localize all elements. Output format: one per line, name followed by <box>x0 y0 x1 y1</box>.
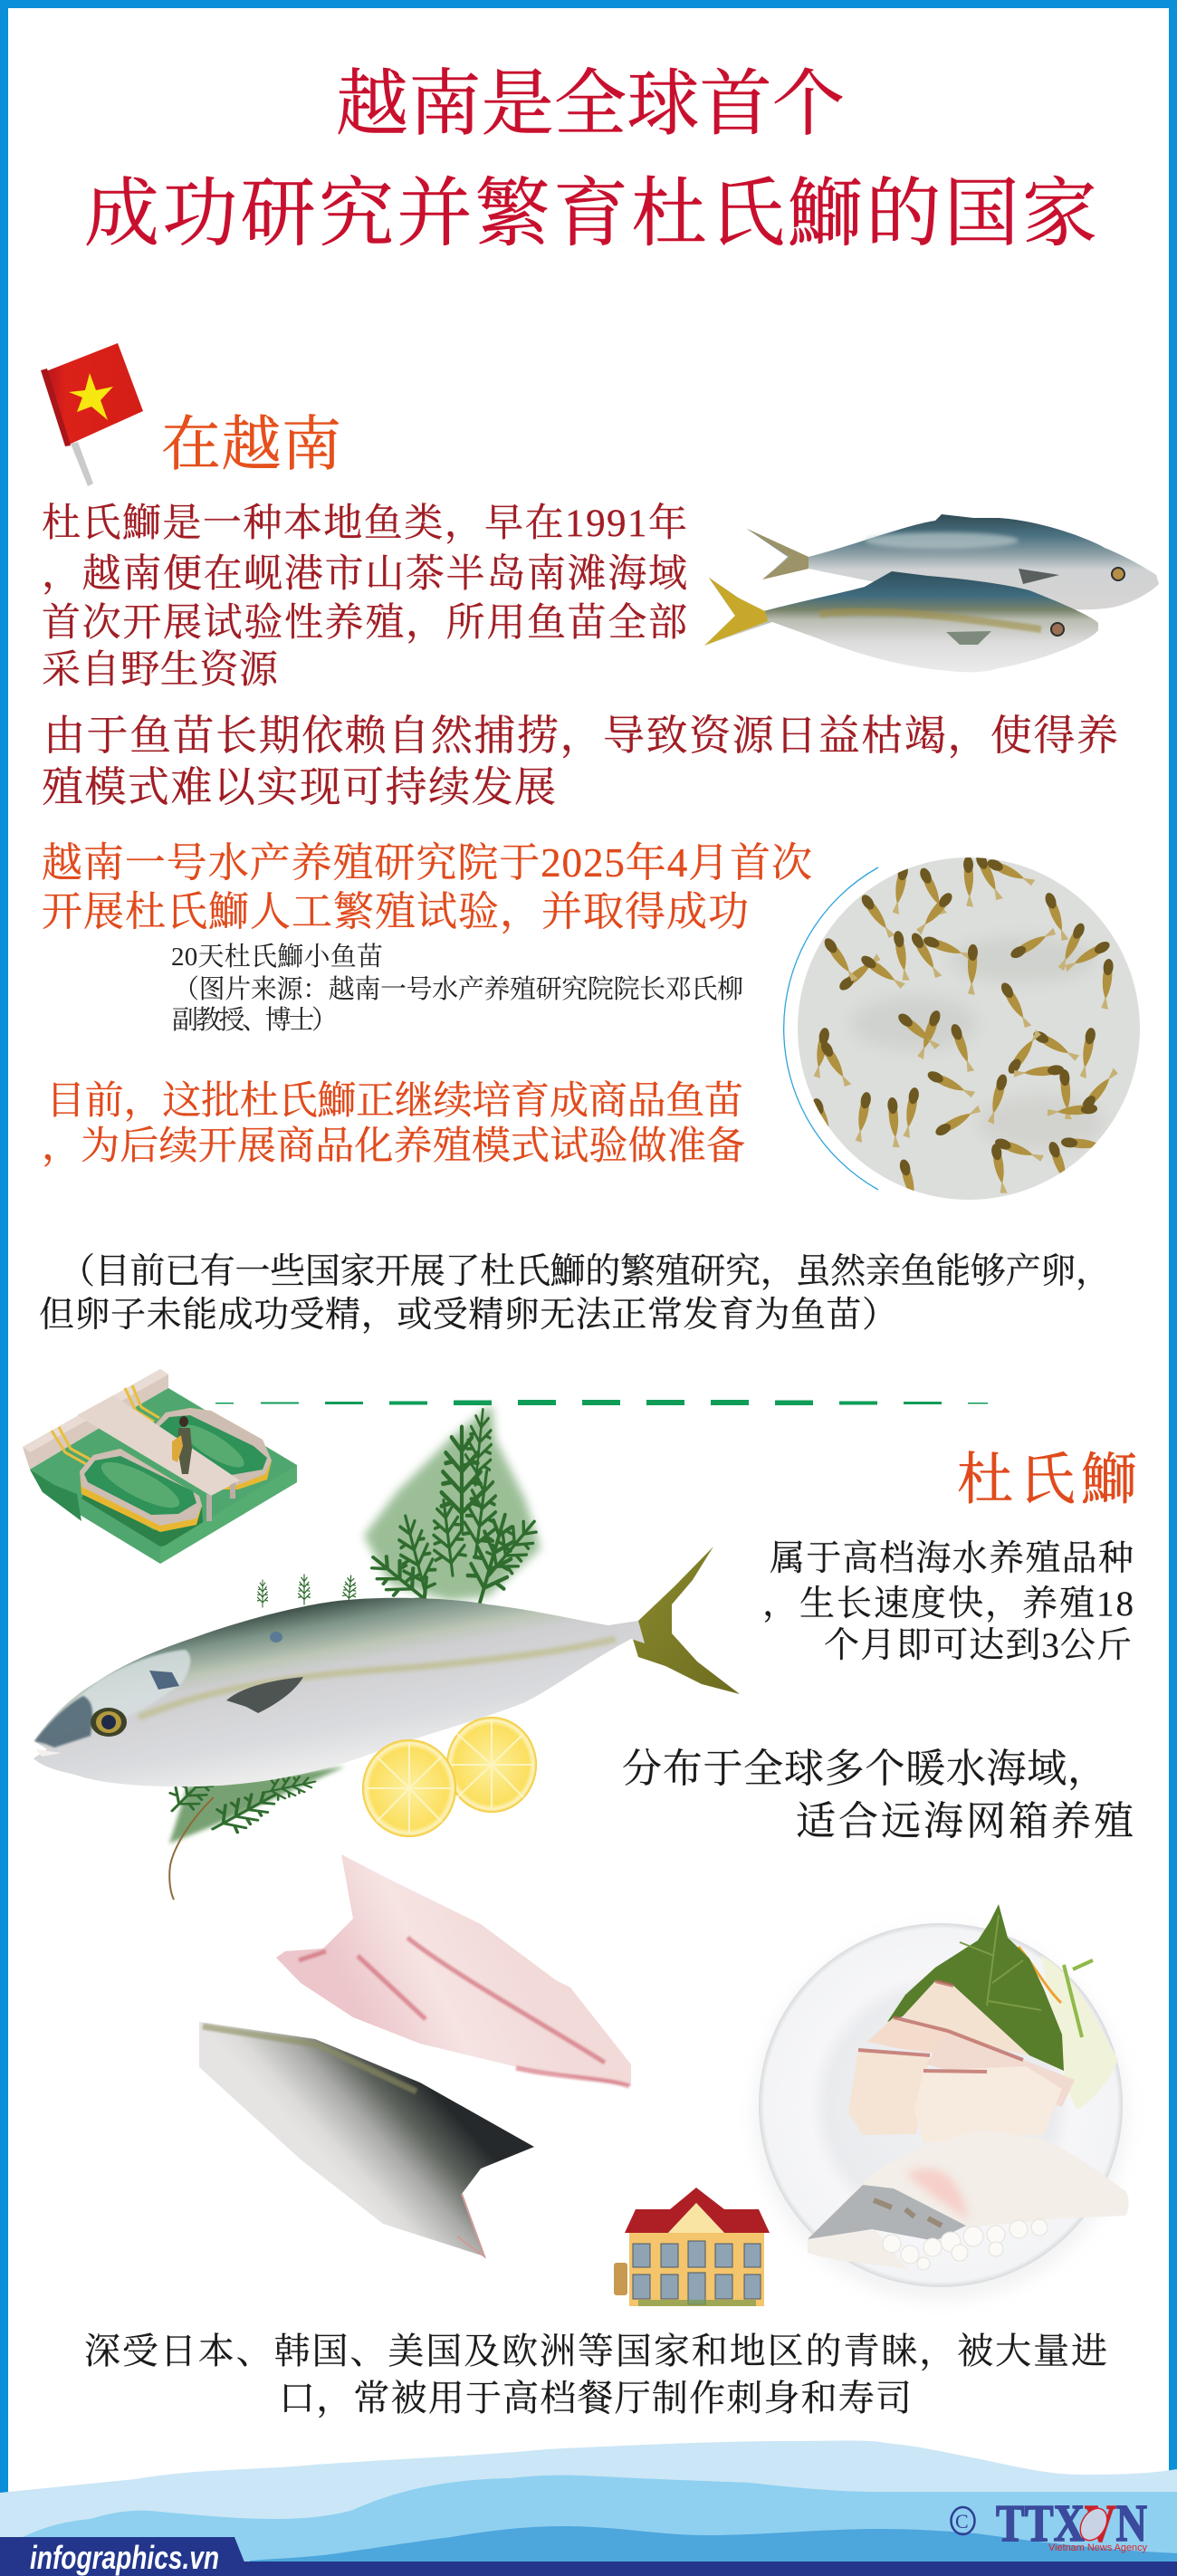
fish: front <box>704 571 1098 672</box>
text block: species description: 属于高档海水养殖品种 <box>770 1539 1134 1578</box>
text block: local species <box>42 502 687 692</box>
image: sashimi and sushi plate <box>754 1904 1129 2301</box>
text block: markets and uses: 深受日本、韩国、美国及欧洲等国家和地区的青睐，被大量进 <box>84 2331 1107 2371</box>
text block: local species: 采自野生资源 <box>42 649 279 692</box>
pipes <box>52 1385 159 1464</box>
image: two yellowtail fish <box>704 514 1159 672</box>
fish body <box>33 1547 740 1786</box>
text block: distribution <box>622 1747 1134 1843</box>
text block: markets and uses <box>84 2331 1107 2418</box>
image: raw fillet <box>276 1854 631 2086</box>
image: whole yellowtail with garnish <box>33 1404 740 1900</box>
text block: markets and uses: 口，常被用于高档餐厅制作刺身和寿司 <box>279 2378 912 2418</box>
footer waves <box>0 2441 1177 2576</box>
text block: species description: ，生长速度快，养殖18 <box>762 1585 1134 1623</box>
text block: other countries note <box>39 1252 1111 1335</box>
text block: resource depletion: 由于鱼苗长期依赖自然捕捞，导致资源日益枯竭，使得养 <box>43 713 1118 759</box>
photo: fish fry in a circle <box>784 851 1150 1213</box>
photo caption: 20天杜氏鰤小鱼苗 <box>171 942 383 972</box>
text block: artificial breeding: 越南一号水产养殖研究院于2025年4月首次 <box>42 840 812 886</box>
garnish: cedar sprig top <box>257 1404 547 1619</box>
figure: farmer <box>172 1416 192 1474</box>
icon: isometric fish farm <box>23 1369 297 1564</box>
title: 成功研究并繁育杜氏鰤的国家 <box>84 172 1097 255</box>
sashimi slices <box>848 1981 1075 2143</box>
text block: other countries note: 但卵子未能成功受精，或受精卵无法正常发育为鱼苗） <box>39 1296 897 1335</box>
text block: resource depletion: 殖模式难以实现可持续发展 <box>42 764 556 810</box>
photo caption <box>171 942 743 1035</box>
farm base <box>23 1369 297 1564</box>
sushi <box>808 2130 1129 2270</box>
text block: local species: 杜氏鰤是一种本地鱼类，早在1991年 <box>42 502 687 545</box>
heading: 在越南: 在越南 <box>161 412 341 478</box>
text block: distribution: 分布于全球多个暖水海域， <box>622 1747 1107 1791</box>
text block: artificial breeding <box>42 840 812 934</box>
text block: species description <box>762 1539 1134 1665</box>
text block: local species: 首次开展试验性养殖，所用鱼苗全部 <box>42 602 687 645</box>
pool: rear <box>154 1408 272 1489</box>
icon: Vietnam flag <box>41 343 143 486</box>
logo: TTXVN: Vietnam News Agency <box>1048 2542 1147 2553</box>
text block: species description: 个月即可达到3公斤 <box>824 1626 1132 1665</box>
logo: TTXVN: C <box>955 2510 969 2533</box>
lemons <box>362 1717 537 1837</box>
fillet detail: bloodline <box>299 1938 629 2086</box>
pool: front <box>80 1449 202 1532</box>
walkway <box>77 1395 240 1521</box>
heading: 杜氏鰤: 杜氏鰤 <box>957 1450 1137 1511</box>
photo caption: 副教授、博士） <box>172 1005 338 1035</box>
text block: nursery status <box>42 1079 745 1168</box>
divider dashes <box>215 1400 988 1405</box>
text block: nursery status: 目前，这批杜氏鰤正继续培育成商品鱼苗 <box>46 1079 743 1123</box>
garnish: shiso leaf <box>887 1904 1064 2071</box>
logo: TTXVN: TTXVN <box>996 2494 1147 2552</box>
icon: restaurant building <box>614 2188 770 2306</box>
footer tab <box>0 2537 250 2576</box>
title: 越南是全球首个 <box>336 65 845 145</box>
text block: artificial breeding: 开展杜氏鰤人工繁殖试验，并取得成功 <box>42 889 749 934</box>
garnish: cedar sprig bottom <box>160 1761 345 1900</box>
image: half fish with skin <box>199 2022 534 2256</box>
fish: rear <box>747 514 1159 609</box>
rice <box>883 2219 1048 2270</box>
text block: local species: ，越南便在岘港市山茶半岛南滩海域 <box>42 552 687 596</box>
garnish: radish strands <box>1041 1956 1118 2110</box>
footer site name: infographics.vn <box>30 2539 219 2576</box>
photo caption: （图片来源：越南一号水产养殖研究院院长邓氏柳 <box>173 974 743 1004</box>
text block: other countries note: （目前已有一些国家开展了杜氏鰤的繁殖研究，虽然亲鱼能够产卵， <box>60 1252 1111 1291</box>
text block: nursery status: ，为后续开展商品化养殖模式试验做准备 <box>42 1125 745 1168</box>
title <box>84 65 1097 255</box>
text block: resource depletion <box>42 713 1118 810</box>
text block: distribution: 适合远海网箱养殖 <box>796 1799 1134 1843</box>
